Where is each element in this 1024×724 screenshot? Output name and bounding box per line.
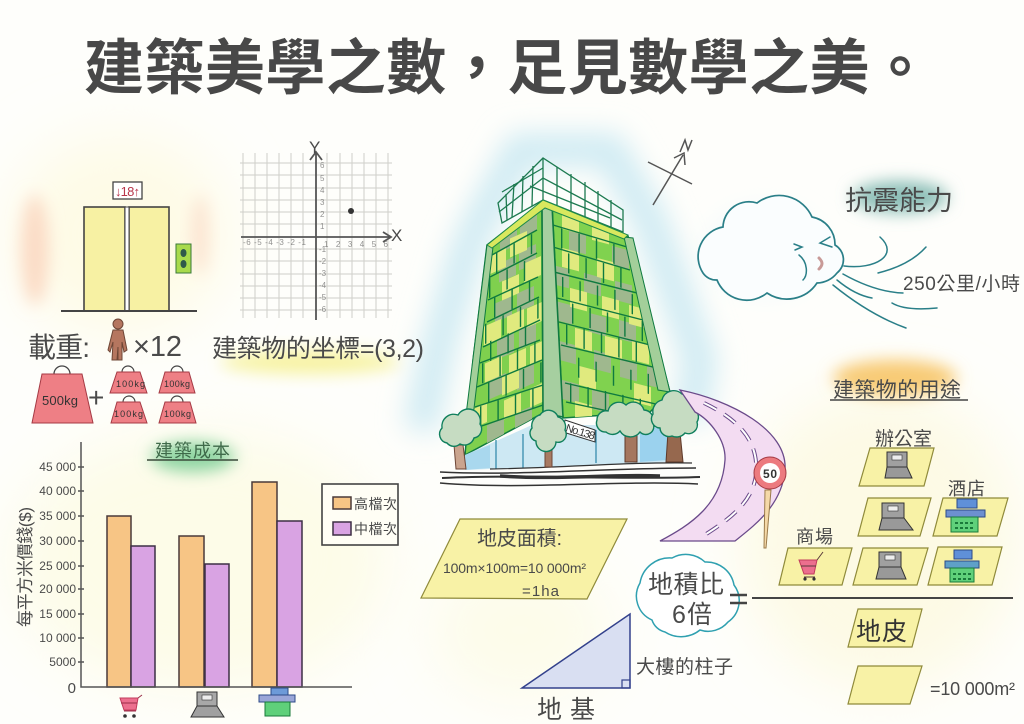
axis numbers: -1: [319, 245, 327, 254]
right facade: [552, 205, 670, 424]
axis numbers: [243, 161, 389, 314]
legend: [322, 484, 398, 545]
axis numbers: 6: [320, 161, 325, 170]
axis numbers: -4: [319, 281, 327, 290]
wind speed: 250公里/小時: [903, 273, 1020, 295]
icon: 100kg weight 4: [159, 396, 196, 423]
panel: site area: 100m×100m=10 000m²: [443, 560, 586, 576]
legend: 中檔次: [354, 521, 397, 537]
axis numbers: -6 -5 -4 -3 -2 -1: [243, 238, 307, 247]
icon: 100kg weight 3: [111, 396, 147, 423]
equals sign: [730, 595, 747, 603]
icon: 100kg weight 1: 100kg: [116, 379, 145, 389]
coordinates label: 建築物的坐標=(3,2): [212, 335, 424, 363]
roof band: [487, 200, 628, 248]
y axis values: 25 000: [39, 559, 76, 573]
axis numbers: -6: [319, 305, 327, 314]
panel: building cost chart: [16, 441, 398, 718]
panel: building: [440, 158, 700, 486]
road: [660, 390, 785, 541]
y axis values: 20 000: [39, 582, 76, 596]
wind heading: 抗震能力: [845, 186, 953, 216]
title: 建築美學之數，足見數學之美。: [84, 35, 930, 102]
tree 1: [440, 409, 482, 469]
bars: [107, 482, 302, 687]
panel: site area: [421, 519, 627, 600]
tile: lower office: [853, 548, 928, 585]
panel: wind resistance: [698, 186, 1020, 328]
fraction line: [752, 597, 1013, 599]
area value: =10 000m²: [930, 679, 1015, 699]
callout: plot ratio cloud: [636, 554, 739, 637]
plus sign: +: [88, 382, 104, 413]
icon: shopping cart: [120, 695, 142, 718]
tile: site: 地皮: [856, 618, 907, 646]
icon: 500kg weight: [32, 366, 93, 423]
panel: elevator load: [28, 182, 197, 423]
y axis values: 30 000: [39, 534, 76, 548]
callout: plot ratio cloud: 地積比: [648, 571, 724, 599]
callout: plot ratio cloud: 6 倍: [672, 601, 712, 629]
axis numbers: 5: [320, 174, 325, 183]
times twelve: ×12: [133, 331, 182, 363]
panel: site triangle: 大樓的柱子: [636, 656, 733, 678]
y axis values: 10 000: [39, 631, 76, 645]
icon: north compass: [648, 140, 692, 205]
axes: [78, 442, 352, 687]
tile: mall: [779, 548, 852, 585]
panel: site area: 地皮面積:: [477, 527, 562, 550]
axis numbers: 1 2 3 4 5 6: [324, 240, 389, 249]
y axis values: 0: [68, 680, 76, 697]
axis labels: Y: [309, 138, 320, 157]
wind lines: [833, 237, 937, 328]
panel: coordinate grid: [240, 138, 402, 320]
ground: [440, 463, 700, 486]
icon: 100kg weight 4: 100kg: [164, 409, 191, 419]
axis numbers: 3: [320, 198, 325, 207]
roof grid: [498, 158, 623, 232]
tile: top office: [859, 448, 934, 486]
axis numbers: -5: [319, 293, 327, 302]
icon: person: [108, 319, 127, 360]
corner column: [542, 202, 563, 417]
icon: office: [191, 692, 224, 717]
icon: hotel: [259, 688, 295, 716]
mall label: 商場: [796, 527, 833, 547]
tile: area legend: [848, 666, 922, 704]
y axis values: 35 000: [39, 509, 76, 523]
elevator doors: [61, 207, 197, 311]
elevator buttons: [176, 244, 191, 273]
chart heading: 建築成本: [155, 441, 230, 461]
axis labels: [309, 138, 402, 245]
axis numbers: 4: [320, 186, 325, 195]
icon: 100kg weight 2: 100kg: [164, 379, 190, 389]
icon: 100kg weight 3: 100kg: [114, 409, 143, 419]
use heading: 建築物的用途: [833, 379, 961, 402]
axis numbers: -3: [319, 269, 327, 278]
panel: site triangle: 地 基: [537, 696, 595, 724]
tile: lower hotel: [928, 547, 1002, 585]
hotel label: 酒店: [948, 479, 985, 499]
icon: 500kg weight: 500kg: [42, 393, 78, 408]
y axis values: 45 000: [39, 460, 76, 474]
floor indicator: ↓18↑: [115, 184, 140, 199]
legend: 高檔次: [354, 496, 397, 512]
load label: 載重:: [28, 332, 90, 363]
axes: [241, 152, 391, 320]
icon: 100kg weight 1: [110, 366, 147, 393]
icon: speed limit sign: 50: [763, 467, 777, 481]
cloud: [698, 195, 843, 300]
office label: 辦公室: [875, 428, 932, 450]
tile: upper hotel: [933, 498, 1008, 536]
axis labels: X: [391, 226, 402, 245]
axis numbers: 1: [320, 222, 325, 231]
tile: site: [848, 609, 922, 647]
y axis values: 40 000: [39, 484, 76, 498]
panel: building use: [752, 379, 1015, 704]
tree 4: [651, 391, 698, 462]
y axis title: 每平方米價錢($): [16, 507, 35, 627]
number sign: No.138: [564, 422, 596, 443]
building point: [348, 208, 354, 214]
axis numbers: 2: [320, 210, 325, 219]
panel: site triangle: [522, 614, 733, 724]
left facade: [465, 202, 547, 455]
y axis values: 15 000: [39, 607, 76, 621]
icon: 100kg weight 2: [159, 366, 195, 393]
glass lobby: [465, 420, 668, 470]
tree 3: [596, 402, 654, 462]
y axis values: [39, 460, 76, 697]
cloud face: [794, 237, 832, 280]
watercolour washes: [10, 135, 1020, 700]
y axis values: 5000: [49, 655, 76, 669]
axis numbers: -2: [319, 257, 327, 266]
panel: site area: =1ha: [522, 583, 560, 600]
tile: middle office: [858, 498, 931, 536]
icon: speed limit sign: [754, 457, 786, 548]
tree 2: [530, 410, 566, 467]
